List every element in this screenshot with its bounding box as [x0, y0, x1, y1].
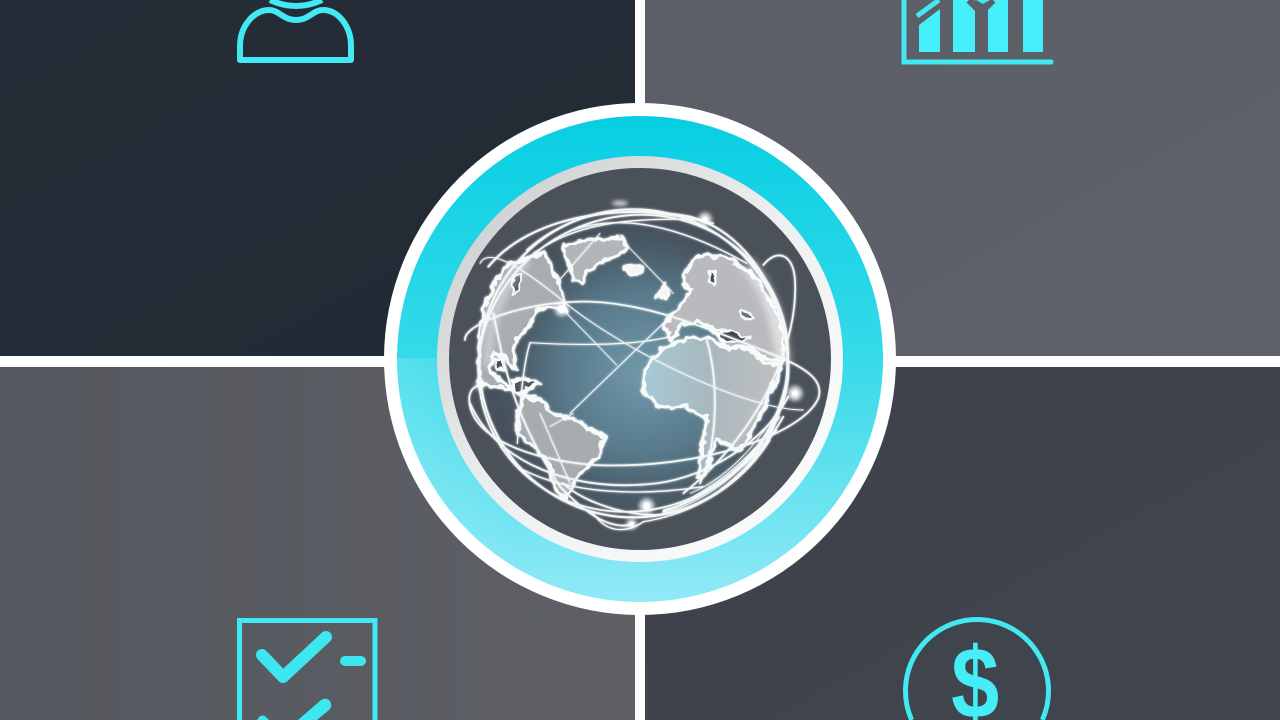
center badge: globe ring [384, 103, 896, 615]
icon: bar chart [904, 0, 1051, 62]
silver inner ring [437, 156, 843, 562]
south america [517, 395, 605, 498]
baltic [709, 272, 716, 287]
hudson bay [512, 273, 522, 293]
britain [657, 285, 670, 300]
icon: person [240, 0, 351, 60]
orbit lines [429, 164, 837, 562]
icon: checklist [240, 620, 375, 720]
bright western limb [488, 260, 527, 367]
africa [643, 337, 782, 478]
iceland [625, 265, 643, 275]
teal ring [397, 116, 883, 602]
mediterranean [717, 331, 750, 342]
glow points [475, 201, 802, 529]
globe illustration [429, 164, 837, 562]
outer white ring [384, 103, 896, 615]
bright eastern limb [747, 263, 784, 363]
dark globe disc [449, 168, 831, 550]
teal ring lighter lower-left step [397, 358, 478, 533]
panel: top right quadrant [645, 0, 1280, 356]
south-east light streaks [697, 420, 780, 500]
continents [478, 237, 784, 498]
globe ocean [479, 209, 787, 517]
gulf of mexico [495, 358, 505, 370]
panel: top left quadrant [0, 0, 635, 356]
eurasia [664, 254, 784, 363]
panel: bottom left quadrant [0, 367, 635, 720]
north america [478, 252, 567, 390]
black sea [740, 311, 753, 319]
panel: bottom right quadrant [645, 367, 1280, 720]
central america [513, 378, 538, 395]
icon: dollar coin [905, 619, 1048, 720]
greenland [563, 237, 627, 284]
